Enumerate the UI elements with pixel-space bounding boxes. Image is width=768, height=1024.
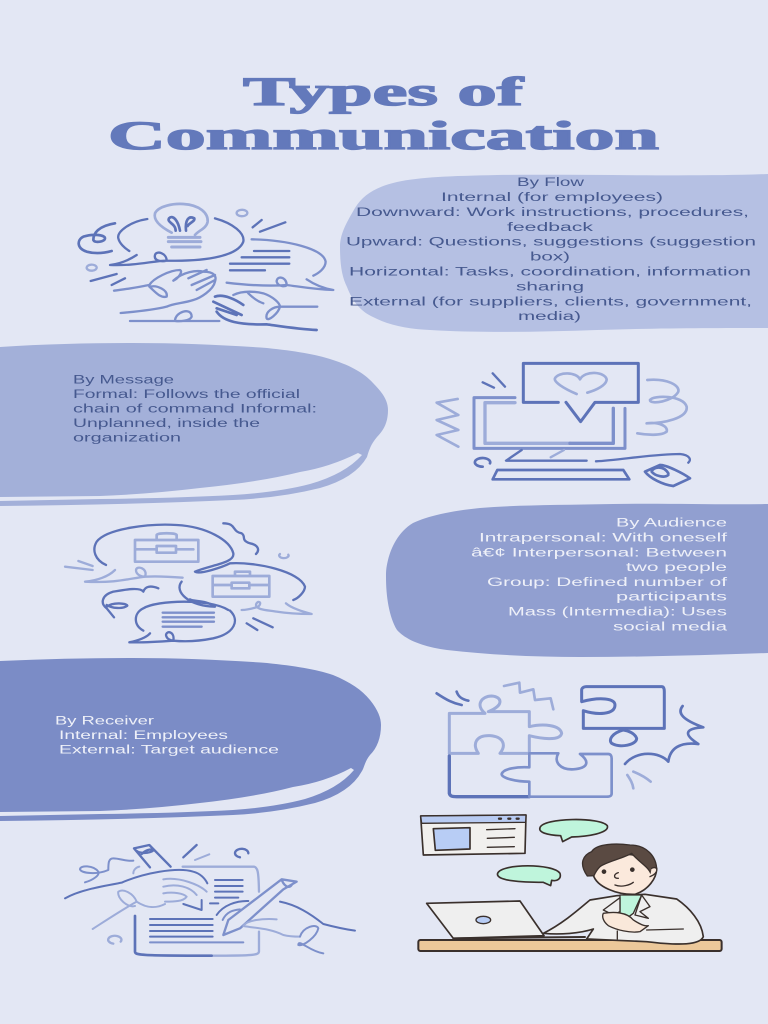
panel: by flow: Downward: Work instructions, procedures, <box>356 207 749 219</box>
panel: by flow: Internal (for employees) <box>441 192 663 204</box>
panel: by audience <box>386 504 768 657</box>
panel: by flow: Upward: Questions, suggestions (suggestion <box>346 236 756 248</box>
illustration: man at laptop with chat bubbles <box>418 815 722 951</box>
panel: by flow: feedback <box>507 222 593 234</box>
icon: light bulb speech bubbles and hands <box>79 204 333 330</box>
panel: by flow: Horizontal: Tasks, coordination, information <box>349 266 751 278</box>
panel: by audience: â€¢ Interpersonal: Between <box>471 548 727 560</box>
panel: by flow: External (for suppliers, clients, government, <box>349 296 752 308</box>
panel: by message: chain of command Informal: <box>73 404 317 416</box>
panel: by message: organization <box>73 432 181 444</box>
laptop <box>427 901 585 938</box>
panel: by flow: media) <box>518 311 581 323</box>
table <box>418 940 722 951</box>
title: Types of <box>243 69 524 114</box>
chat bubble bottom <box>497 866 560 886</box>
browser window <box>421 815 526 855</box>
panel: by audience: social media <box>613 622 728 634</box>
icon: speech bubbles with briefcases <box>65 523 312 642</box>
panel: by receiver: External: Target audience <box>59 744 279 756</box>
icon: hand writing on document <box>65 845 355 956</box>
panel: by message: Formal: Follows the official <box>73 389 300 401</box>
panel: by flow: sharing <box>516 282 584 294</box>
icon: puzzle pieces <box>437 683 703 797</box>
panel: by audience: two people <box>626 562 727 574</box>
panel: by receiver <box>0 658 381 821</box>
panel: by message: By Message <box>73 374 174 386</box>
panel: by message: Unplanned, inside the <box>73 418 260 430</box>
panel: by flow <box>340 174 768 332</box>
panel: by audience: Intrapersonal: With oneself <box>479 532 728 544</box>
panel: by message <box>0 343 388 506</box>
man <box>543 844 703 944</box>
title <box>108 69 659 158</box>
panel: by flow: By Flow <box>517 177 585 189</box>
panel: by audience: By Audience <box>616 518 727 530</box>
panel: by receiver: Internal: Employees <box>59 730 228 742</box>
title: Communication <box>108 113 659 158</box>
panel: by flow: box) <box>530 252 570 264</box>
panel: by audience: Mass (Intermedia): Uses <box>508 606 727 618</box>
panel: by audience: participants <box>616 592 727 604</box>
panel: by receiver: By Receiver <box>55 716 154 728</box>
chat bubble top <box>540 819 608 842</box>
panel: by audience: Group: Defined number of <box>487 577 728 589</box>
icon: computer with heart message <box>437 363 690 486</box>
